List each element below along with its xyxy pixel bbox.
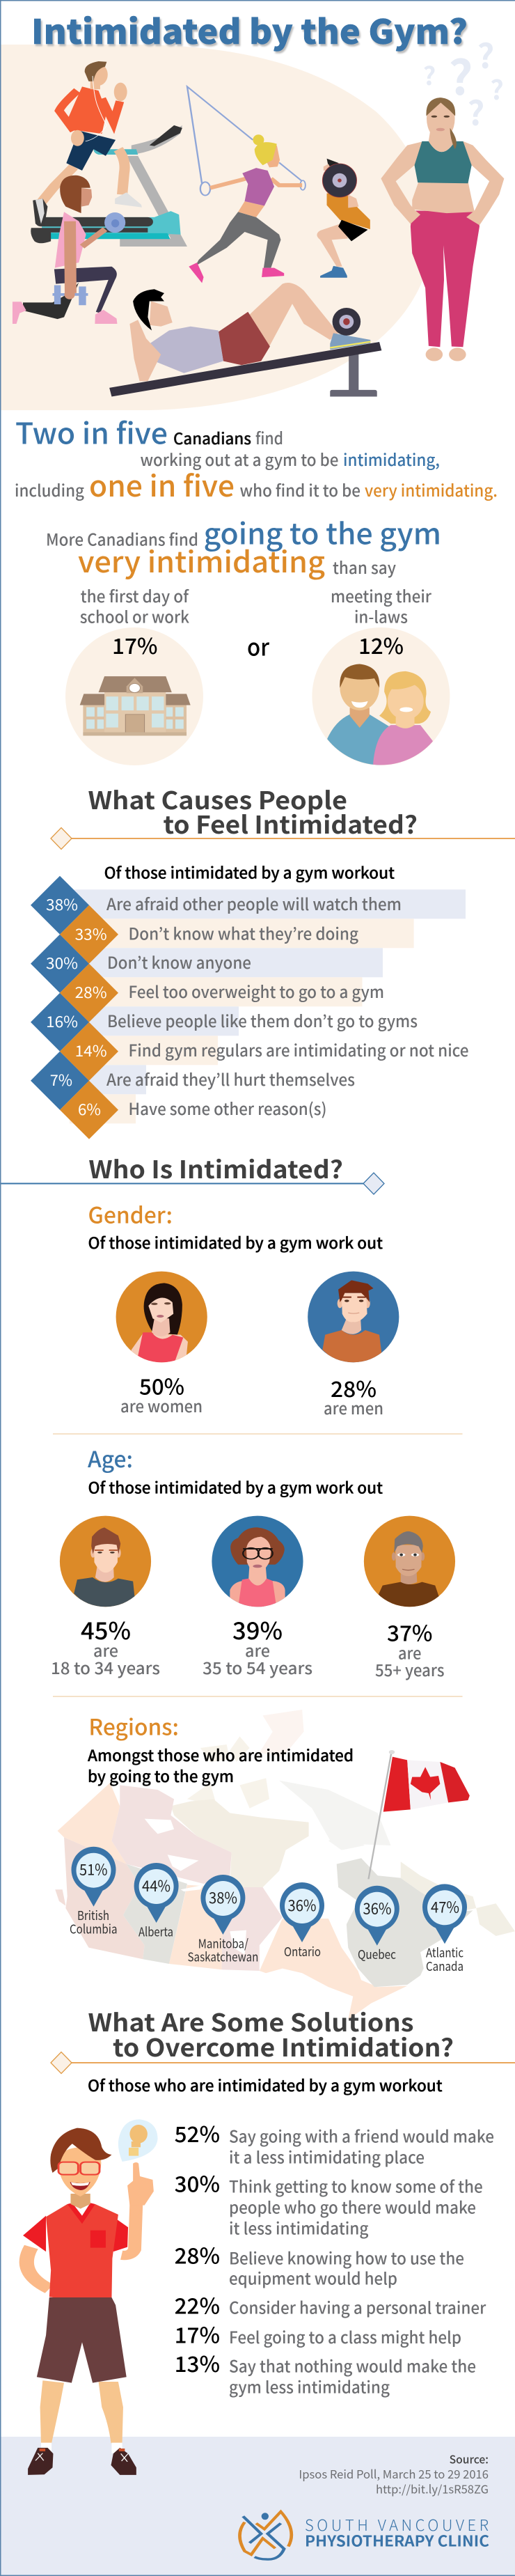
- or: or: [247, 629, 269, 663]
- avatar: middle-aged woman: [212, 1516, 303, 1607]
- row: 16%: 16%: [46, 1010, 78, 1032]
- icon: Canadian flag: [368, 1750, 470, 1879]
- pin: British Columbia: [70, 1847, 117, 1938]
- solution: 28%: [175, 2239, 464, 2290]
- text block: two in five: Two in five: [15, 411, 168, 453]
- pin: Alberta: 44%: [142, 1874, 171, 1896]
- woman with cable rope: [187, 86, 306, 283]
- text block: two in five: working out at a gym to be: [141, 447, 338, 471]
- pin: Ontario: [280, 1882, 324, 1960]
- comparison: meeting their in-laws: [312, 584, 450, 769]
- panel: regions: [70, 1710, 470, 1975]
- solution: 13%: Say that nothing would make the: [229, 2354, 476, 2378]
- solution: 28%: Believe knowing how to use the: [229, 2246, 464, 2270]
- panel: age: [51, 1442, 455, 1681]
- solution: 13%: 13%: [175, 2347, 220, 2378]
- footer background: [0, 2437, 515, 2576]
- row: 33%: Don’t know what they’re doing: [128, 921, 358, 944]
- solution: 30%: Think getting to know some of the: [229, 2173, 483, 2197]
- solution: 30%: it less intimidating: [229, 2215, 369, 2239]
- panel: age: 35 to 54 years: [203, 1655, 312, 1679]
- solution: 22%: Consider having a personal trainer: [229, 2295, 486, 2319]
- text block: two in five: Canadians: [173, 427, 251, 449]
- solution: 17%: Feel going to a class might help: [229, 2325, 461, 2348]
- section heading: what causes people to feel intimidated: to Feel Intimidated?: [163, 806, 418, 841]
- pin: Manitoba/Saskatchewan: Saskatchewan: [188, 1948, 258, 1966]
- man doing sit-ups on bench: [109, 283, 381, 396]
- text block: two in five: including: [15, 478, 84, 501]
- source note: http://bit.ly/1sR58ZG: [376, 2481, 489, 2497]
- panel: gender: 28%: [331, 1372, 377, 1403]
- row: 28%: 28%: [75, 981, 107, 1003]
- text block: going to the gym: going to the gym: [204, 511, 441, 554]
- chart: causes of intimidation: [31, 876, 469, 1139]
- panel: age: 18 to 34 years: [51, 1655, 160, 1679]
- panel: regions: by going to the gym: [88, 1765, 234, 1787]
- panel: gender: are women: [120, 1394, 203, 1417]
- icon: school building: [80, 676, 191, 735]
- solution: 28%: equipment would help: [229, 2266, 397, 2290]
- solution: 28%: 28%: [175, 2239, 220, 2270]
- pin: Atlantic Canada: [422, 1884, 467, 1975]
- woman lunging with dumbbells: [13, 175, 125, 324]
- icon: light bulb bubble: [118, 2119, 158, 2162]
- row: 38%: 38%: [46, 893, 78, 915]
- text block: going to the gym: than say: [333, 555, 396, 579]
- section heading: solutions: What Are Some Solutions: [88, 2004, 413, 2039]
- row: 30%: Don’t know anyone: [107, 950, 251, 974]
- avatar: older man: [364, 1516, 455, 1607]
- hero illustration: gym goers: [13, 61, 504, 396]
- panel: age: 39%: [232, 1612, 283, 1646]
- comparison: first day of school or work: [65, 584, 203, 765]
- logo: South Vancouver Physiotherapy Clinic: SOUTH VANCOUVER: [305, 2513, 489, 2536]
- panel: age: Of those intimidated by a gym work out: [88, 1476, 383, 1498]
- pin: Quebec: 36%: [363, 1897, 391, 1919]
- row: 38%: Are afraid other people will watch them: [106, 891, 402, 915]
- text block: two in five: who find it to be: [239, 478, 360, 501]
- question marks: ?: [423, 56, 436, 93]
- hero background shape: [0, 45, 432, 410]
- panel: age: are: [93, 1638, 118, 1662]
- map of Canada: [55, 1710, 515, 2020]
- solution: 22%: 22%: [175, 2288, 220, 2320]
- solution: 22%: [175, 2288, 486, 2320]
- solution: 52%: it a less intimidating place: [229, 2145, 425, 2169]
- row: 6%: 6%: [78, 1098, 101, 1120]
- section heading: who is intimidated: [0, 1150, 384, 1194]
- question marks: ?: [477, 29, 494, 78]
- icon: treadmill: [31, 125, 187, 247]
- solution: 52%: [175, 2117, 494, 2169]
- man squatting with barbell plate: [317, 159, 370, 278]
- row: 14%: 14%: [75, 1039, 107, 1061]
- panel: age: are: [245, 1638, 270, 1662]
- row: 33%: 33%: [75, 922, 107, 944]
- solutions list: [175, 2117, 494, 2398]
- comparison: meeting their in-laws: 12%: [358, 629, 404, 660]
- panel: gender: 50%: [139, 1370, 184, 1401]
- panel: regions: Amongst those who are intimidated: [88, 1744, 354, 1766]
- question marks: ?: [449, 40, 473, 109]
- pin: Atlantic Canada: Canada: [426, 1957, 464, 1975]
- pin: Manitoba/Saskatchewan: 38%: [209, 1886, 237, 1908]
- logo: South Vancouver Physiotherapy Clinic: PHYSIOTHERAPY CLINIC: [305, 2530, 489, 2552]
- panel: gender: are men: [324, 1396, 383, 1419]
- panel: age: 55+ years: [375, 1657, 444, 1681]
- row: 28%: Feel too overweight to go to a gym: [128, 979, 384, 1003]
- solution: 52%: Say going with a friend would make: [229, 2124, 494, 2148]
- panel: gender: Gender:: [88, 1199, 173, 1231]
- question marks: [423, 29, 504, 135]
- pin: British Columbia: 51%: [79, 1858, 107, 1880]
- pin: Manitoba/Saskatchewan: [188, 1875, 258, 1966]
- illustration: man with idea: [23, 2119, 158, 2475]
- solution: 17%: 17%: [175, 2318, 220, 2349]
- runner: [33, 61, 142, 226]
- row: 7%: 7%: [50, 1068, 72, 1091]
- comparison: first day of school or work: 17%: [112, 629, 157, 660]
- row: 30%: [46, 950, 251, 974]
- woman standing, hands on hips: [381, 97, 504, 361]
- pin: British Columbia: Columbia: [70, 1920, 117, 1938]
- logo: South Vancouver Physiotherapy Clinic: [239, 2512, 489, 2559]
- comparison: meeting their in-laws: meeting their: [331, 584, 431, 607]
- pin: Ontario: 36%: [288, 1894, 316, 1916]
- subheading: of those intimidated: Of those intimidated by a gym workout: [104, 861, 395, 884]
- section heading: what causes people to feel intimidated: What Causes People: [88, 781, 347, 817]
- source note: [299, 2450, 489, 2497]
- panel: gender: [88, 1199, 399, 1419]
- pin: British Columbia: British: [77, 1906, 109, 1924]
- pin: Manitoba/Saskatchewan: Manitoba/: [198, 1935, 248, 1953]
- solution: 30%: 30%: [175, 2167, 220, 2199]
- pin: Alberta: Alberta: [138, 1923, 173, 1941]
- avatar: man: [308, 1272, 399, 1364]
- comparison: meeting their in-laws: in-laws: [354, 604, 408, 628]
- comparison: first day of school or work: school or work: [80, 604, 189, 628]
- row: 30%: 30%: [46, 951, 78, 974]
- section heading: solutions: to Overcome Intimidation?: [113, 2029, 454, 2064]
- text block: two in five: [15, 411, 498, 506]
- text block: two in five: one in five: [89, 463, 235, 506]
- comparison: first day of school or work: the first day of: [81, 584, 189, 607]
- avatar: woman: [116, 1272, 207, 1364]
- text block: going to the gym: [46, 511, 441, 581]
- text block: going to the gym: More Canadians find: [46, 526, 198, 550]
- text block: two in five: intimidating,: [343, 447, 440, 471]
- solution: 52%: 52%: [175, 2117, 220, 2148]
- text block: two in five: find: [255, 426, 283, 449]
- source note: Ipsos Reid Poll, March 25 to 29 2016: [299, 2465, 489, 2482]
- panel: gender: Of those intimidated by a gym work out: [88, 1231, 383, 1254]
- row: 7%: Are afraid they’ll hurt themselves: [106, 1067, 355, 1091]
- panel: regions: Regions:: [88, 1710, 179, 1742]
- text block: two in five: very intimidating.: [365, 478, 498, 501]
- section heading: what causes people to feel intimidated: [51, 781, 515, 850]
- section heading: solutions: [51, 2004, 515, 2074]
- row: 6%: Have some other reason(s): [128, 1096, 327, 1120]
- panel: age: are: [398, 1641, 422, 1664]
- question marks: ?: [490, 69, 504, 107]
- icon: logo mark: [239, 2512, 292, 2559]
- solution: 30%: people who go there would make: [229, 2194, 476, 2218]
- panel: age: 37%: [387, 1616, 433, 1648]
- text block: going to the gym: very intimidating: [78, 539, 325, 581]
- pin: Atlantic Canada: Atlantic: [426, 1944, 464, 1962]
- pin: Quebec: Quebec: [358, 1945, 396, 1963]
- question marks: ?: [468, 86, 484, 135]
- row: 16%: Believe people like them don’t go to gyms: [107, 1008, 418, 1032]
- row: 14%: Find gym regulars are intimidating or not nice: [128, 1038, 469, 1061]
- pin: Quebec: [355, 1886, 399, 1963]
- solution: 13%: [175, 2347, 476, 2398]
- solution: 30%: [175, 2167, 483, 2239]
- panel: age: 45%: [81, 1612, 131, 1646]
- title: Intimidated by the Gym?: [31, 5, 468, 54]
- subheading: of those who are intimidated: Of those who are intimidated by a gym workout: [88, 2074, 443, 2096]
- icon: couple: [327, 664, 433, 769]
- solution: 17%: [175, 2318, 461, 2349]
- source note: Source:: [450, 2450, 489, 2467]
- pin: Alberta: [134, 1863, 179, 1941]
- section heading: who is intimidated: Who Is Intimidated?: [88, 1150, 343, 1186]
- panel: age: Age:: [88, 1442, 133, 1474]
- avatar: young man: [60, 1516, 151, 1607]
- solution: 13%: gym less intimidating: [229, 2375, 390, 2398]
- pin: Ontario: Ontario: [284, 1942, 321, 1960]
- pin: Atlantic Canada: 47%: [431, 1895, 459, 1917]
